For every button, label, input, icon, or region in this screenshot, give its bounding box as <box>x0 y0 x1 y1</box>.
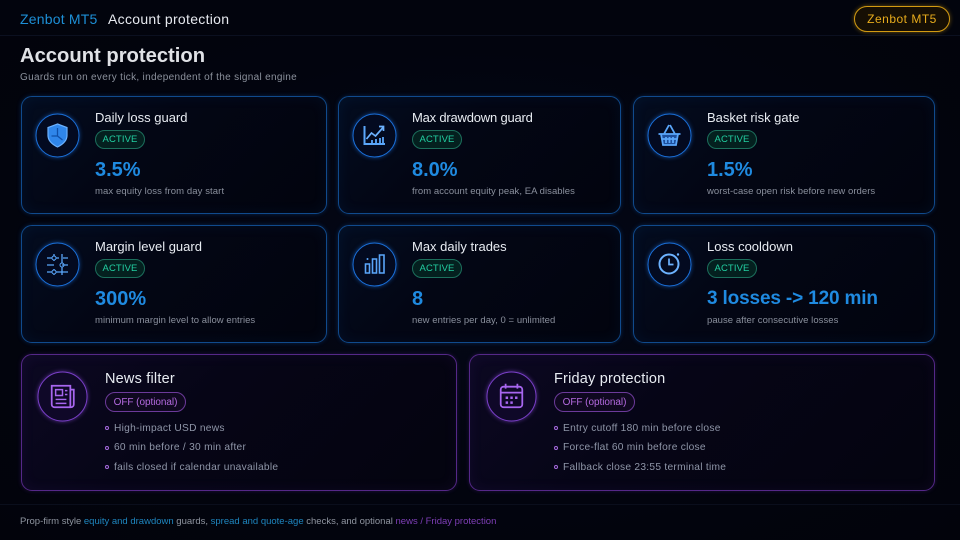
card title: Friday protection <box>554 370 665 386</box>
bullet: fails closed if calendar unavailable <box>114 462 278 472</box>
status pill <box>105 392 186 412</box>
panel: basket risk gate <box>633 96 935 214</box>
icon: sliders <box>32 240 82 290</box>
status pill: OFF (optional) <box>563 397 626 408</box>
status pill <box>95 130 145 149</box>
card title: Max drawdown guard <box>412 110 533 125</box>
badge: Zenbot MT5: Zenbot MT5 <box>867 12 937 26</box>
panel: max daily trades <box>338 225 621 343</box>
description: max equity loss from day start <box>95 186 224 197</box>
description: minimum margin level to allow entries <box>95 315 255 326</box>
bullet: Fallback close 23:55 terminal time <box>563 462 726 472</box>
bullet: High-impact USD news <box>114 422 225 434</box>
icon: clock <box>644 240 694 290</box>
status pill: OFF (optional) <box>114 397 177 408</box>
header bar <box>0 0 960 36</box>
value: 8.0% <box>412 158 458 180</box>
status pill: ACTIVE <box>103 263 137 274</box>
status pill <box>412 259 462 278</box>
status pill: ACTIVE <box>420 263 454 274</box>
bullet list <box>105 422 278 472</box>
icon: calendar <box>484 368 540 424</box>
bullet list <box>554 422 726 472</box>
icon: bars <box>350 240 400 290</box>
description: from account equity peak, EA disables <box>412 186 575 197</box>
card title: Margin level guard <box>95 239 202 254</box>
status pill <box>707 259 757 278</box>
status pill: ACTIVE <box>715 263 749 274</box>
icon: newspaper <box>34 368 90 424</box>
status pill: ACTIVE <box>715 134 749 145</box>
value: 8 <box>412 288 423 310</box>
card title: Loss cooldown <box>707 239 793 254</box>
panel: max drawdown guard <box>338 96 621 214</box>
status pill <box>412 130 462 149</box>
icon: basket <box>644 110 694 160</box>
brand label: Zenbot MT5 <box>20 11 97 27</box>
panel: news filter <box>21 354 457 491</box>
footer note: Prop-firm style equity and drawdown guards, spread and quote-age checks, and optional news / Friday protection <box>20 516 496 527</box>
panel: margin level guard <box>21 225 327 343</box>
bullet: Force-flat 60 min before close <box>563 442 706 453</box>
status pill <box>95 259 145 278</box>
bullet: Entry cutoff 180 min before close <box>563 422 721 434</box>
description: worst-case open risk before new orders <box>707 186 875 197</box>
header section title: Account protection <box>108 11 229 27</box>
icon: chart <box>350 110 400 160</box>
description: new entries per day, 0 = unlimited <box>412 315 555 326</box>
value: 3 losses -> 120 min <box>707 288 878 308</box>
card title: Basket risk gate <box>707 110 800 125</box>
card title: News filter <box>105 370 175 386</box>
panel: daily loss guard <box>21 96 327 214</box>
status pill <box>554 392 635 412</box>
card title: Daily loss guard <box>95 110 188 125</box>
page subtitle: Guards run on every tick, independent of the signal engine <box>20 72 297 83</box>
footer note <box>0 504 960 540</box>
icon: shield <box>32 110 82 160</box>
page heading: Account protection <box>20 45 205 67</box>
value: 300% <box>95 288 146 310</box>
status pill: ACTIVE <box>103 134 137 145</box>
panel: friday protection <box>469 354 935 491</box>
badge: Zenbot MT5 <box>854 6 950 32</box>
value: 3.5% <box>95 158 141 180</box>
bullet: 60 min before / 30 min after <box>114 442 246 453</box>
status pill <box>707 130 757 149</box>
panel: loss cooldown <box>633 225 935 343</box>
card title: Max daily trades <box>412 239 507 254</box>
value: 1.5% <box>707 158 753 180</box>
description: pause after consecutive losses <box>707 315 838 326</box>
status pill: ACTIVE <box>420 134 454 145</box>
